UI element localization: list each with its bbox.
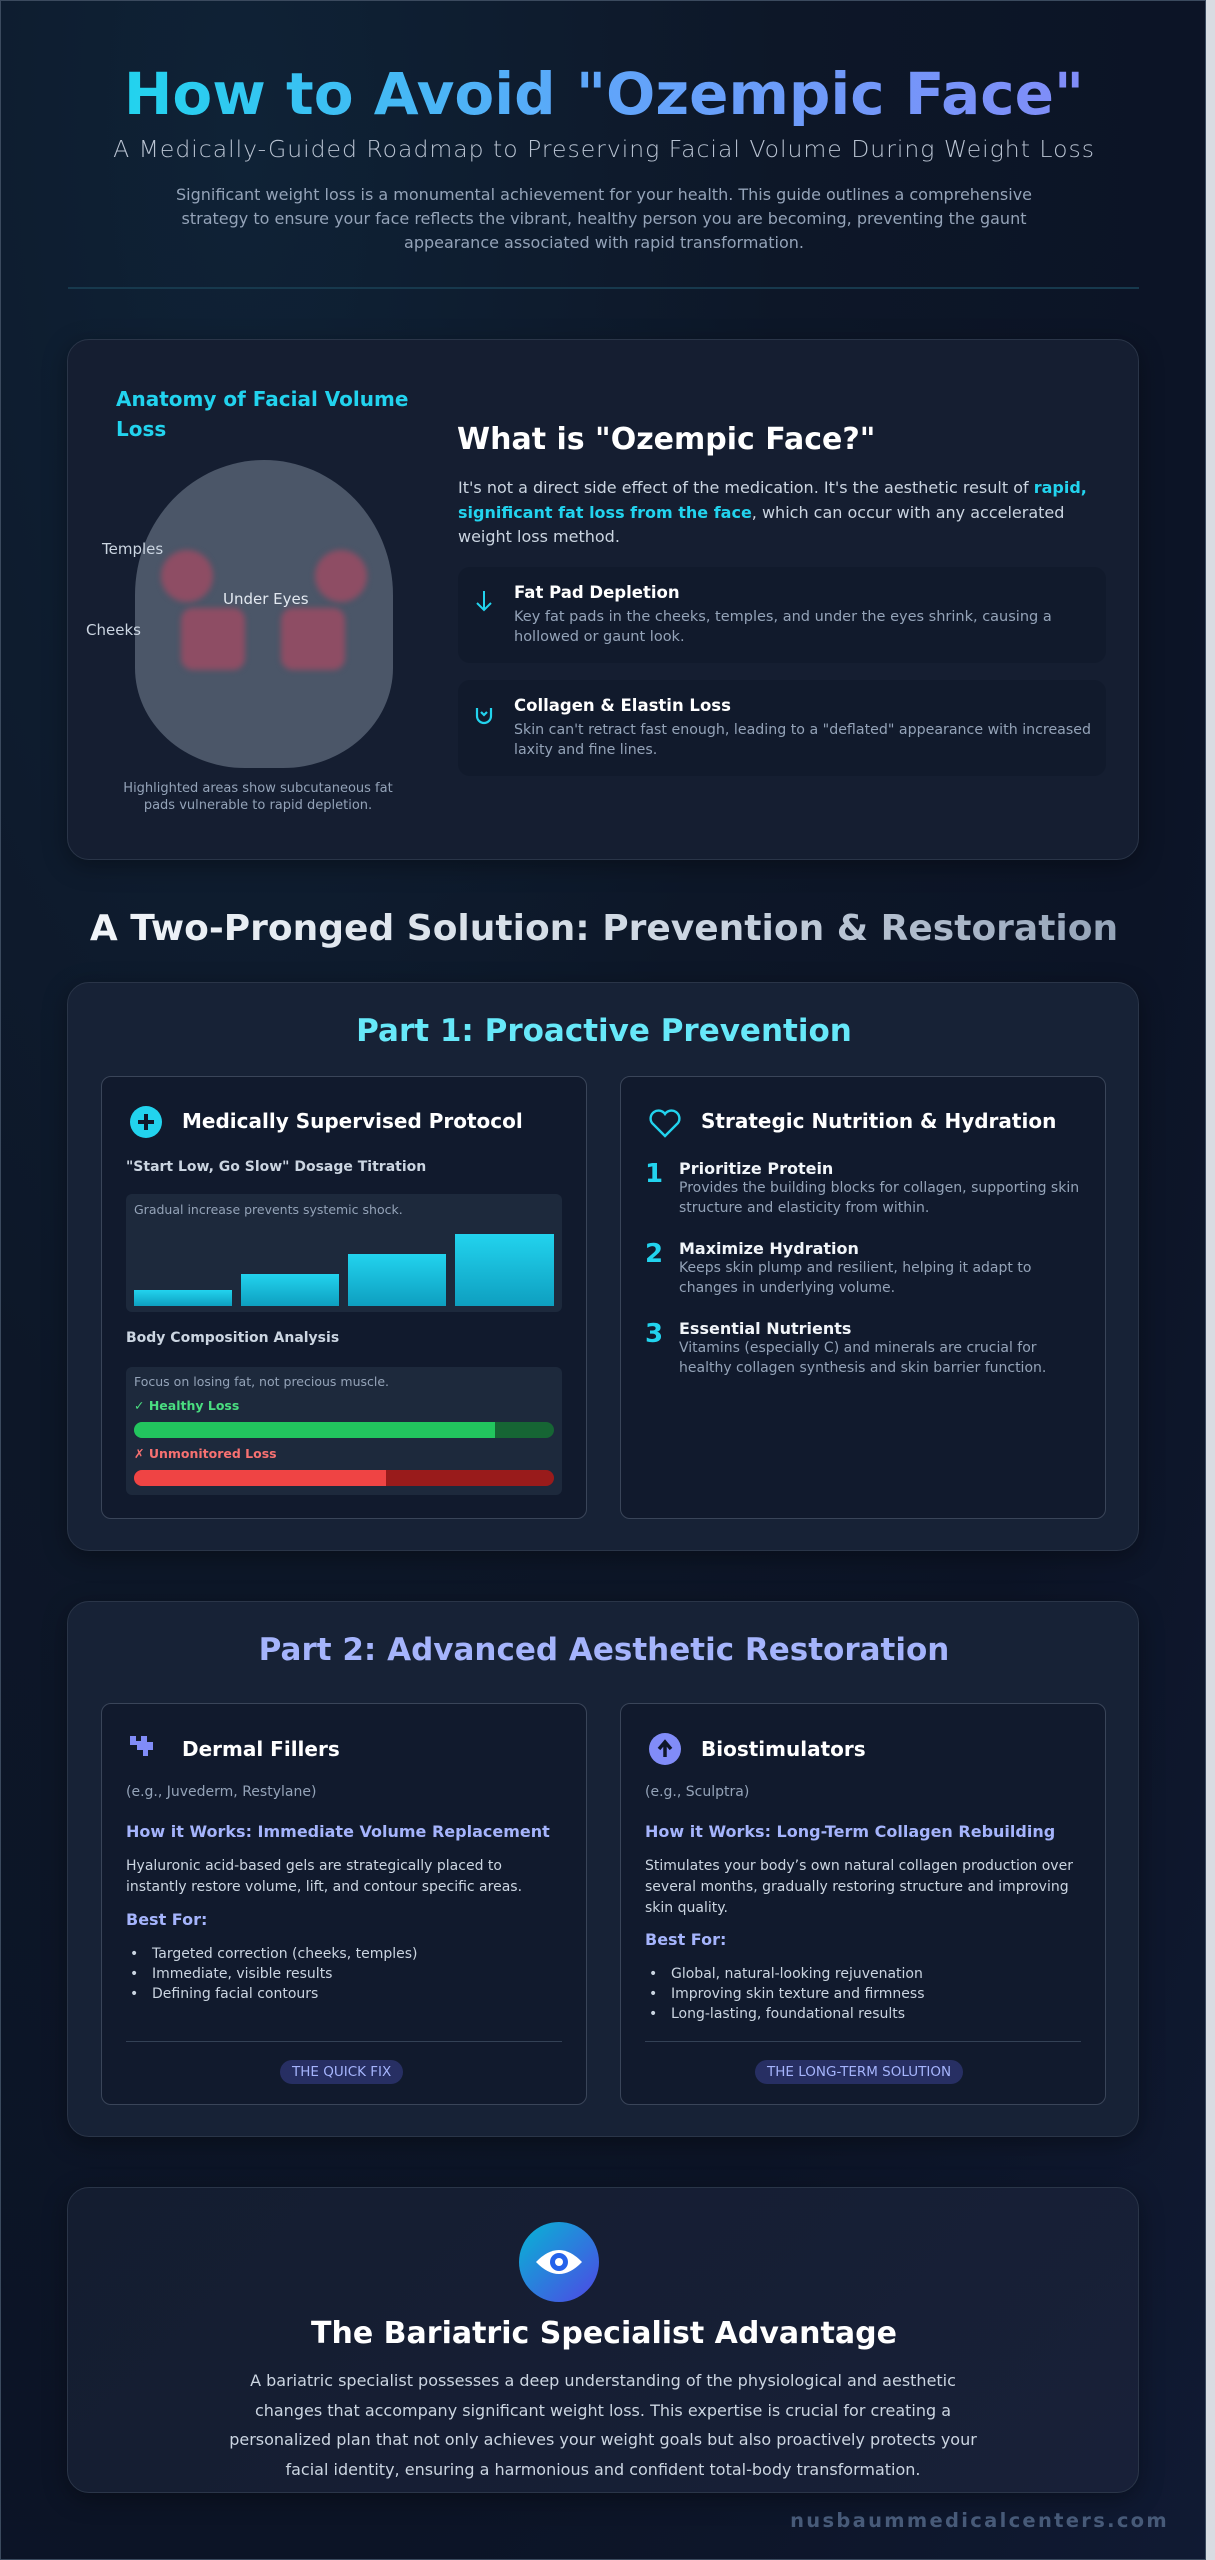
card: nutrition: Provides the building blocks for collagen, supporting skin structure and elasticity from within. <box>679 1180 1079 1216</box>
card: fat pad depletion <box>458 567 1106 663</box>
card: fat pad depletion: Key fat pads in the cheeks, temples, and under the eyes shrink, causing a hollowed or gaunt look. <box>514 609 1052 645</box>
card: collagen loss <box>458 680 1106 776</box>
panel: part 2 <box>67 1601 1139 2137</box>
bar chart: Gradual increase prevents systemic shock. <box>134 1202 403 1217</box>
card: biostimulators <box>620 1703 1106 2105</box>
card: fat pad depletion: Fat Pad Depletion <box>514 583 680 602</box>
title: How to Avoid "Ozempic Face" <box>124 60 1084 128</box>
card: medically supervised: Body Composition Analysis <box>126 1330 339 1346</box>
card: nutrition <box>620 1076 1106 1519</box>
card: biostimulators: How it Works: Long-Term Collagen Rebuilding <box>645 1822 1055 1841</box>
part 1 title: Part 1: Proactive Prevention <box>356 1013 852 1049</box>
card: nutrition: Essential Nutrients <box>679 1319 851 1338</box>
card: nutrition: Prioritize Protein <box>679 1159 833 1178</box>
definition text: It's not a direct side effect of the medication. It's the aesthetic result of rapid, significant fat loss from the face, which can occur with any accelerated weight loss method. <box>458 478 1087 546</box>
face diagram: Temples <box>102 540 163 558</box>
bariatric text: A bariatric specialist possesses a deep understanding of the physiological and aesthetic changes that accompany significant weight loss. This expertise is crucial for creating a personalized plan that not only achieves your weight goals but also proactively protects your facial identity, ensuring a harmonious and confident total-body transformation. <box>229 2371 977 2478</box>
badge <box>280 2060 403 2084</box>
card: dermal fillers: Hyaluronic acid-based gels are strategically placed to instantly restore volume, lift, and contour specific areas. <box>126 1858 522 1895</box>
icon: eye <box>519 2222 599 2302</box>
card: biostimulators: Long-lasting, foundational results <box>671 2006 905 2022</box>
icon: up arrow circle <box>649 1733 681 1765</box>
card: biostimulators: Stimulates your body’s own natural collagen production over several months, gradually restoring structure and improving skin quality. <box>645 1858 1073 1916</box>
what is heading: What is "Ozempic Face?" <box>457 422 875 457</box>
card: nutrition: 2 <box>645 1239 663 1269</box>
face diagram: Under Eyes <box>223 590 309 608</box>
card: dermal fillers: Targeted correction (cheeks, temples) <box>152 1946 418 1962</box>
card: biostimulators: Improving skin texture and firmness <box>671 1986 925 2002</box>
badge: THE LONG-TERM SOLUTION <box>767 2064 951 2080</box>
card: nutrition: Maximize Hydration <box>679 1239 859 1258</box>
bariatric heading: The Bariatric Specialist Advantage <box>311 2316 897 2351</box>
subtitle: A Medically-Guided Roadmap to Preserving Facial Volume During Weight Loss <box>113 135 1095 163</box>
card: biostimulators: Biostimulators <box>701 1737 866 1761</box>
face diagram: Cheeks <box>86 621 141 639</box>
panel: what is ozempic face <box>67 339 1139 860</box>
card: nutrition: 1 <box>645 1159 663 1189</box>
progress bars: ✓ Healthy Loss <box>134 1398 239 1413</box>
intro text: Significant weight loss is a monumental achievement for your health. This guide outlines a comprehensive strategy to ensure your face reflects the vibrant, healthy person you are becoming, preventing the gaunt appearance associated with rapid transformation. <box>176 185 1032 252</box>
progress bars: Focus on losing fat, not precious muscle. <box>134 1374 389 1389</box>
bar chart <box>126 1194 562 1312</box>
card: nutrition: Strategic Nutrition & Hydration <box>701 1109 1056 1133</box>
card: collagen loss: Skin can't retract fast enough, leading to a "deflated" appearance with increased laxity and fine lines. <box>514 722 1091 758</box>
icon: plus <box>130 1106 162 1138</box>
card: nutrition: 3 <box>645 1319 663 1349</box>
card: medically supervised: "Start Low, Go Slow" Dosage Titration <box>126 1159 426 1175</box>
card: medically supervised <box>101 1076 587 1519</box>
card: dermal fillers <box>101 1703 587 2105</box>
icon: skin <box>476 708 492 724</box>
badge <box>755 2060 963 2084</box>
icon: down arrow <box>476 591 492 612</box>
card: nutrition: Vitamins (especially C) and minerals are crucial for healthy collagen synthesis and skin barrier function. <box>679 1340 1046 1376</box>
card: dermal fillers: Immediate, visible results <box>152 1966 332 1982</box>
icon: heart <box>649 1109 681 1138</box>
panel: bariatric specialist <box>67 2187 1139 2493</box>
card: nutrition: Keeps skin plump and resilient, helping it adapt to changes in underlying volume. <box>679 1260 1031 1296</box>
card: biostimulators: Global, natural-looking rejuvenation <box>671 1966 923 1982</box>
card: dermal fillers: How it Works: Immediate Volume Replacement <box>126 1822 550 1841</box>
card: collagen loss: Collagen & Elastin Loss <box>514 696 731 715</box>
card: biostimulators: Best For: <box>645 1930 726 1949</box>
panel: part 1 <box>67 982 1139 1551</box>
badge: THE QUICK FIX <box>292 2064 391 2080</box>
card: medically supervised: Medically Supervised Protocol <box>182 1109 523 1133</box>
card: dermal fillers: Defining facial contours <box>152 1986 318 2002</box>
anatomy heading: Anatomy of Facial Volume Loss <box>116 387 408 441</box>
progress bars: ✗ Unmonitored Loss <box>134 1446 277 1461</box>
progress bars <box>126 1367 562 1495</box>
diagram caption: Highlighted areas show subcutaneous fat pads vulnerable to rapid depletion. <box>123 781 393 813</box>
footer url: nusbaummedicalcenters.com <box>790 2509 1169 2532</box>
card: biostimulators: (e.g., Sculptra) <box>645 1784 749 1800</box>
part 2 title: Part 2: Advanced Aesthetic Restoration <box>259 1632 949 1668</box>
card: dermal fillers: Dermal Fillers <box>182 1737 340 1761</box>
card: dermal fillers: Best For: <box>126 1910 207 1929</box>
icon: filler <box>130 1736 153 1756</box>
face diagram <box>86 460 393 768</box>
section heading: A Two-Pronged Solution: Prevention & Restoration <box>90 908 1118 949</box>
card: dermal fillers: (e.g., Juvederm, Restylane) <box>126 1784 316 1800</box>
